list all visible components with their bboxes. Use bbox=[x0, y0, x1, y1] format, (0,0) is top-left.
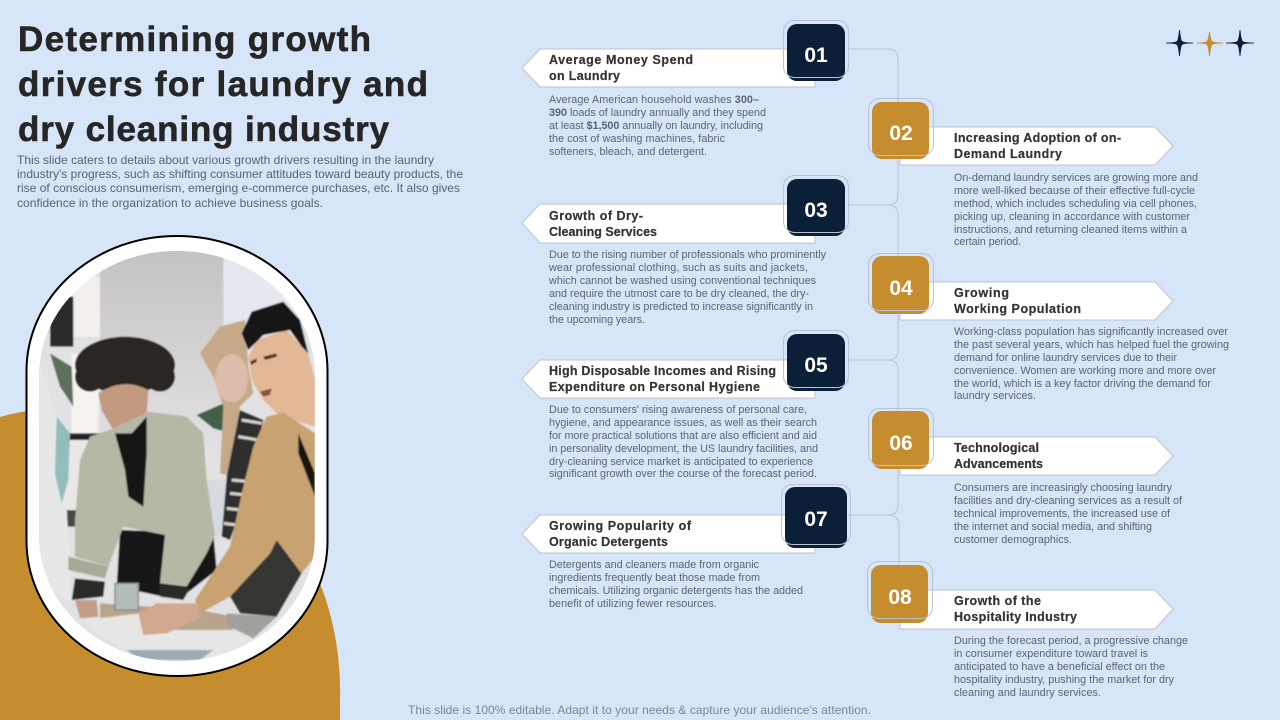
body text 02: certain period. bbox=[954, 236, 1021, 248]
icon: four-point stars bbox=[1166, 30, 1254, 56]
connector lines bbox=[848, 49, 899, 565]
badge 05: 05 bbox=[804, 354, 828, 377]
body text 04: the past several years, which has helped fuel the growing bbox=[954, 339, 1229, 351]
heading 01 bbox=[549, 53, 693, 83]
panel: item 03 bbox=[522, 176, 848, 326]
body text 02: On-demand laundry services are growing more and bbox=[954, 172, 1198, 184]
body text 04: convenience. Women are working more and more over bbox=[954, 365, 1216, 377]
body text 05: dry-cleaning service market is anticipated to experience bbox=[549, 456, 813, 468]
footer note: This slide is 100% editable. Adapt it to your needs & capture your audience's attention. bbox=[408, 703, 871, 717]
body text 04 bbox=[954, 326, 1229, 402]
body text 04: the world, which is a key factor driving the demand for bbox=[954, 378, 1211, 390]
heading 04: Working Population bbox=[954, 302, 1081, 316]
heading 02: Demand Laundry bbox=[954, 147, 1062, 161]
body text 06: technical improvements, the increased use of bbox=[954, 508, 1171, 520]
heading 07: Growing Popularity of bbox=[549, 519, 692, 533]
heading 03: Growth of Dry- bbox=[549, 209, 643, 223]
badge 08 bbox=[868, 562, 932, 623]
heading 04 bbox=[954, 286, 1081, 316]
grey jacket bbox=[75, 412, 215, 587]
badge 06: 06 bbox=[889, 432, 913, 455]
body text 02: picking up, cleaning in accordance with customer bbox=[954, 211, 1190, 223]
man's trousers bbox=[230, 540, 302, 617]
curly hair bbox=[75, 337, 175, 393]
body text 01: Average American household washes 300– bbox=[549, 94, 759, 106]
subtitle text: industry's progress, such as shifting consumer attitudes toward beauty products, the bbox=[17, 167, 463, 181]
body text 07 bbox=[549, 559, 803, 610]
body text 03: the upcoming years. bbox=[549, 314, 645, 326]
heading 05: Expenditure on Personal Hygiene bbox=[549, 380, 760, 394]
badge 05 bbox=[784, 330, 848, 391]
table and papers bbox=[100, 603, 233, 633]
body text 03: wear professional clothing, such as suits and jackets, bbox=[548, 262, 808, 274]
heading 06 bbox=[954, 441, 1043, 471]
body text 05: in personality development, the US laundry facilities, and bbox=[549, 443, 818, 455]
black pants bbox=[117, 530, 217, 597]
heading 02 bbox=[954, 131, 1121, 161]
body text 08: anticipated to have a beneficial effect on the bbox=[954, 661, 1165, 673]
body text 03: Due to the rising number of professionals who prominently bbox=[549, 249, 827, 261]
body text 05: hygiene, and appearance issues, as well as their search bbox=[549, 417, 817, 429]
body text 02: instructions, and returning cleaned items within a bbox=[954, 224, 1187, 236]
body text 02: method, which includes scheduling via cell phones, bbox=[954, 198, 1197, 210]
panel: item 07 bbox=[522, 484, 850, 610]
heading 04: Growing bbox=[954, 286, 1009, 300]
heading 03 bbox=[549, 209, 657, 239]
heading 01: Average Money Spend bbox=[549, 53, 693, 67]
body text 08: During the forecast period, a progressive change bbox=[954, 635, 1188, 647]
body text 05: significant growth over the course of the forecast period. bbox=[549, 468, 817, 480]
panel: item 08 bbox=[868, 562, 1188, 699]
panel: item 06 bbox=[868, 408, 1183, 546]
body text 04: demand for online laundry services due to their bbox=[954, 352, 1177, 364]
badge 01: 01 bbox=[804, 44, 828, 67]
badge 06 bbox=[868, 408, 934, 469]
heading 06: Advancements bbox=[954, 457, 1043, 471]
left figure bbox=[62, 509, 69, 528]
badge 04 bbox=[868, 254, 934, 314]
body text 08: in consumer expenditure toward travel is bbox=[954, 648, 1149, 660]
body text 03: which cannot be washed using conventional techniques bbox=[548, 275, 817, 287]
photo frame bbox=[26, 236, 328, 676]
heading 07 bbox=[549, 519, 692, 549]
body text 05: Due to consumers' rising awareness of personal care, bbox=[549, 404, 807, 416]
body text 05: for more practical solutions that are also efficient and aid bbox=[549, 430, 817, 442]
badge 07: 07 bbox=[804, 508, 828, 531]
body text 07: ingredients frequently beat those made from bbox=[549, 572, 760, 584]
heading 06: Technological bbox=[954, 441, 1039, 455]
panel: item 04 bbox=[868, 254, 1229, 402]
body text 06 bbox=[954, 482, 1183, 546]
body text 06: customer demographics. bbox=[954, 534, 1072, 546]
body text 06: Consumers are increasingly choosing laundry bbox=[954, 482, 1173, 494]
heading 03: Cleaning Services bbox=[549, 225, 657, 239]
body text 07: benefit of utilizing fewer resources. bbox=[549, 598, 717, 610]
body text 02 bbox=[954, 172, 1198, 248]
body text 04: laundry services. bbox=[954, 390, 1036, 402]
body text 01: 390 loads of laundry annually and they spend bbox=[549, 107, 766, 119]
heading 05 bbox=[549, 364, 776, 394]
panel: item 05 bbox=[522, 330, 848, 480]
body text 03: cleaning industry is predicted to increase significantly in bbox=[549, 301, 813, 313]
heading 08: Hospitality Industry bbox=[954, 610, 1077, 624]
blonde woman bbox=[200, 320, 253, 477]
heading 02: Increasing Adoption of on- bbox=[954, 131, 1121, 145]
title: Determining growth bbox=[18, 20, 371, 59]
body text 06: facilities and dry-cleaning services as a result of bbox=[954, 495, 1183, 507]
badge 08: 08 bbox=[888, 586, 912, 609]
heading 01: on Laundry bbox=[549, 69, 620, 83]
badge 04: 04 bbox=[889, 277, 913, 300]
heading 05: High Disposable Incomes and Rising bbox=[549, 364, 776, 378]
body text 03 bbox=[548, 249, 827, 326]
body text 08 bbox=[954, 635, 1188, 699]
subtitle text: confidence in the organization to achieve business goals. bbox=[17, 196, 323, 210]
body text 05 bbox=[549, 404, 818, 480]
badge 02: 02 bbox=[889, 122, 913, 145]
body text 06: the internet and social media, and shifting bbox=[954, 521, 1152, 533]
subtitle text bbox=[17, 153, 463, 210]
badge 07 bbox=[782, 484, 850, 548]
badge 03: 03 bbox=[804, 199, 828, 222]
body text 01: the cost of washing machines, fabric bbox=[549, 133, 726, 145]
photo: team at a table bbox=[33, 247, 320, 667]
heading 08 bbox=[954, 594, 1077, 624]
body text 08: cleaning and laundry services. bbox=[954, 687, 1101, 699]
body text 02: more well-liked because of their effective full-cycle bbox=[954, 185, 1195, 197]
subtitle text: rise of conscious consumerism, emerging e-commerce purchases, etc. It also gives bbox=[17, 181, 460, 195]
badge 02 bbox=[868, 98, 934, 159]
title bbox=[18, 20, 428, 149]
title: drivers for laundry and bbox=[18, 65, 428, 104]
body text 04: Working-class population has significantly increased over bbox=[954, 326, 1228, 338]
man bbox=[248, 330, 315, 427]
panel: item 02 bbox=[868, 98, 1198, 248]
subtitle text: This slide caters to details about various growth drivers resulting in the laundry bbox=[17, 153, 434, 167]
badge 01 bbox=[784, 20, 848, 81]
body text 01: softeners, bleach, and detergent. bbox=[549, 146, 707, 158]
body text 07: chemicals. Utilizing organic detergents has the added bbox=[549, 585, 803, 597]
body text 01: at least $1,500 annually on laundry, including bbox=[549, 120, 763, 132]
badge 03 bbox=[784, 176, 848, 236]
heading 08: Growth of the bbox=[954, 594, 1041, 608]
gold background shape bbox=[0, 408, 340, 720]
title: dry cleaning industry bbox=[18, 110, 390, 149]
tan jacket bbox=[195, 413, 315, 613]
body text 01 bbox=[549, 94, 766, 158]
body text 07: Detergents and cleaners made from organic bbox=[549, 559, 760, 571]
body text 08: hospitality industry, pushing the market for dry bbox=[954, 674, 1175, 686]
heading 07: Organic Detergents bbox=[549, 535, 668, 549]
panel: item 01 bbox=[522, 20, 848, 158]
body text 03: and require the utmost care to be dry cleaned, the dry- bbox=[549, 288, 809, 300]
